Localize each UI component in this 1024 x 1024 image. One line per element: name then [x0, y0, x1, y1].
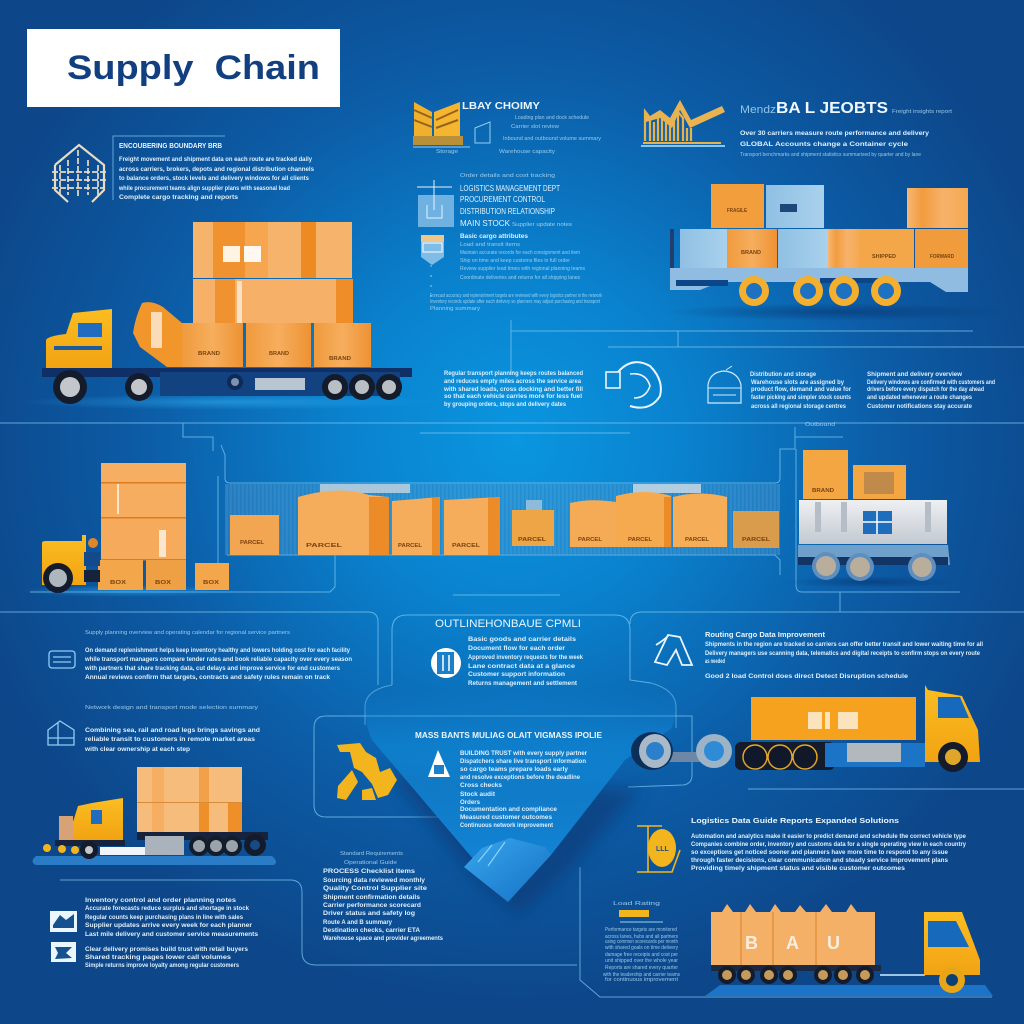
text block: right panel lower: Automation and analytics make it easier to predict demand and schedule the correct vehicle type	[691, 833, 966, 840]
text block: rating column: with the leadership and carrier teams	[602, 972, 680, 978]
truck: yellow cab with orange cargo: BRAND	[269, 351, 289, 357]
text block: central column: LOGISTICS MANAGEMENT DEPT	[460, 183, 560, 193]
text block: left panel lower: reliable transit to customers in remote market areas	[85, 736, 255, 743]
icon: yellow warehouse stack	[413, 102, 490, 147]
text block: central column: Forecast accuracy and replenishment targets are reviewed with every logistics partner in the network	[430, 293, 602, 299]
text block: bottom-left upper: Last mile delivery and customer service measurements	[85, 931, 258, 938]
truck: light blue carrier with orange cargo: BRAND	[741, 250, 761, 256]
warehouse band with parcels: PARCEL	[240, 540, 264, 546]
warehouse band with parcels: PARCEL	[306, 543, 342, 549]
text block: top-left intro: across carriers, brokers, depots and regional distribution channels	[119, 166, 314, 173]
text block: central column	[430, 173, 602, 312]
text block: central column: Review supplier lead times with regional planning teams	[460, 266, 585, 272]
text block: top-left intro: Freight movement and shipment data on each route are tracked daily	[119, 156, 312, 163]
text block: LBAY CHOIMY: LBAY CHOIMY	[462, 100, 540, 112]
text block: bottom-left lower: Simple returns improve loyalty among regular customers	[85, 962, 239, 969]
warehouse band with parcels: PARCEL	[452, 543, 480, 549]
warehouse band with parcels: PARCEL	[518, 537, 546, 543]
warehouse band with parcels: PARCEL	[742, 537, 770, 543]
text block: left panel lower	[84, 705, 260, 753]
text block: rating column	[602, 901, 680, 983]
truck: orange trailer with detached wheels	[631, 685, 980, 772]
text block: bottom center column	[323, 851, 443, 942]
truck: yellow cab with orange cargo	[20, 222, 440, 410]
text block: right panel upper: Good 2 load Control does direct Detect Disruption schedule	[705, 673, 908, 680]
text block: route notes: and reduces empty miles across the service area	[444, 378, 581, 385]
text block: central column: Load and transit items	[460, 242, 520, 248]
panel: funnel text: Dispatchers share live transport information	[460, 758, 586, 765]
truck: forklift with stacked boxes: BOX	[203, 580, 220, 586]
text block: central column: Order details and cost tracking	[460, 173, 555, 179]
text block: bottom center column: Destination checks, carrier ETA	[323, 927, 420, 934]
panel: center heading block	[431, 618, 583, 687]
text block: left panel upper: Annual reviews confirm that targets, contracts and safety rules remain on track	[85, 674, 330, 681]
panel: center heading block: Approved inventory requests for the week	[468, 654, 583, 661]
icon: cargo badge	[50, 911, 77, 932]
icon: circular supply loop	[606, 362, 661, 408]
text block: top-left intro: Complete cargo tracking and reports	[119, 194, 238, 201]
truck: yellow cab with orange cargo: BRAND	[329, 356, 351, 362]
warehouse band with parcels	[225, 484, 780, 555]
text block: LBAY CHOIMY: Storage	[436, 149, 458, 155]
icon: yellow map	[337, 743, 397, 800]
panel: center heading block: OUTLINEHONBAUE CPMLI	[435, 618, 581, 630]
text block: route notes: with shared loads, cross docking and better fill	[443, 386, 583, 393]
panel: funnel text: so cargo teams prepare loads early	[460, 766, 568, 773]
text block: bottom-left upper: Inventory control and order planning notes	[85, 897, 236, 904]
text block: top-left intro: to balance orders, stock levels and delivery windows for all clients	[119, 175, 309, 182]
text block: bottom-left upper: Supplier updates arrive every week for each planner	[85, 922, 252, 929]
panel: center heading block: Returns management and settlement	[468, 680, 578, 687]
text block: rating column: Performance targets are monitored	[605, 927, 677, 933]
text block: right panel upper	[705, 630, 983, 680]
icon: gold bar chart with trend	[641, 100, 725, 147]
truck: cargo container with yellow cab	[705, 904, 993, 996]
text block: delivery notes	[867, 371, 995, 410]
text block: bottom-left upper: Regular counts keep purchasing plans in line with sales	[85, 914, 243, 921]
panel: center heading block: Document flow for each order	[468, 645, 565, 652]
text block: central column: Maintain accurate records for each consignment and item	[460, 250, 580, 256]
text block: storage notes: product flow, demand and value for	[751, 386, 851, 393]
truck: white trailer with boxes	[785, 450, 955, 588]
text block: BA L JEOBTS: Over 30 carriers measure route performance and delivery	[740, 130, 929, 137]
truck: forklift with stacked boxes: BOX	[155, 580, 172, 586]
truck: cargo container with yellow cab: B A U	[745, 933, 840, 953]
text block: storage notes: Warehouse slots are assigned by	[751, 379, 844, 386]
text block: central column: Planning summary	[430, 306, 480, 312]
panel: funnel text	[415, 731, 603, 829]
text block: bottom-left lower: Clear delivery promises build trust with retail buyers	[85, 946, 248, 953]
text block: central column: PROCUREMENT CONTROL	[460, 194, 545, 204]
text block: bottom center column: Route A and B summary	[323, 919, 392, 926]
truck: light blue carrier with orange cargo: FORWARD	[930, 254, 954, 260]
text block: central column: DISTRIBUTION RELATIONSHIP	[460, 206, 555, 216]
truck: white trailer with boxes: BRAND	[812, 488, 834, 494]
text block: LBAY CHOIMY: Inbound and outbound volume summary	[503, 136, 601, 142]
text block: LBAY CHOIMY: Warehouse capacity	[499, 149, 555, 155]
text block: left panel lower: with clear ownership at each step	[84, 746, 190, 753]
text block: top-left intro: while procurement teams align supplier plans with seasonal load	[118, 185, 290, 192]
text block: right panel lower: so exceptions get noticed sooner and planners have more time to respond to any issue	[691, 849, 948, 856]
icon: yellow L and coin: LLL	[656, 846, 670, 853]
text block: rating column: using common scorecards per month	[605, 939, 678, 945]
text block: BA L JEOBTS: BA L JEOBTS	[776, 100, 888, 117]
icon: small shield badge	[421, 235, 444, 300]
panel: funnel text: Orders	[460, 799, 480, 806]
panel: center heading block: Basic goods and carrier details	[468, 636, 576, 643]
text block: central column: Inventory records update after each delivery so planners may adjust purchasing and transport	[430, 299, 600, 305]
warehouse band with parcels: PARCEL	[685, 537, 709, 543]
panel: funnel text: MASS BANTS MULIAG OLAIT VIGMASS IPOLIE	[415, 731, 603, 740]
panel: funnel text: Cross checks	[460, 782, 502, 789]
funnel shape	[365, 685, 676, 915]
text block: storage notes: Distribution and storage	[750, 371, 816, 378]
text block: rating column: across lanes, hubs and all partners	[605, 934, 678, 940]
text block: central column: Ship on time and keep customs files in full order	[460, 258, 570, 264]
title banner: Supply Chain	[67, 49, 320, 87]
text block: rating column: damage free receipts and cost per	[605, 952, 678, 958]
warehouse band with parcels: PARCEL	[628, 537, 652, 543]
text block: route notes: Regular transport planning keeps routes balanced	[444, 370, 583, 377]
text block: left panel upper: Supply planning overview and operating calendar for regional service partners	[85, 630, 290, 636]
text block: left panel upper	[84, 630, 352, 681]
text block: BA L JEOBTS: Freight insights report	[892, 109, 953, 115]
text block: left panel lower: Combining sea, rail and road legs brings savings and	[85, 727, 260, 734]
text block: left panel upper: while transport managers compare tender rates and book reliable capacity over every season	[84, 656, 352, 663]
text block: storage notes: faster picking and simpler stock counts	[751, 394, 851, 401]
text block: bottom-left upper: Accurate forecasts reduce surplus and shortage in stock	[85, 905, 249, 912]
text block: rating column: with shared goals on time delivery	[604, 945, 678, 951]
text block: delivery notes: Customer notifications stay accurate	[867, 403, 972, 410]
text block: BA L JEOBTS: GLOBAL Accounts change a Container cycle	[740, 141, 908, 148]
icon: service lane	[655, 635, 692, 665]
icon: yellow L and coin	[637, 826, 680, 872]
text block: rating column: unit shipped over the whole year	[605, 958, 678, 964]
text block: bottom center column: Warehouse space and provider agreements	[323, 935, 443, 942]
panel: funnel text: BUILDING TRUST with every supply partner	[460, 750, 587, 757]
text block: bottom-left lower: Shared tracking pages lower call volumes	[85, 954, 231, 961]
truck: light blue carrier with orange cargo	[665, 184, 1015, 321]
text block: left panel upper: On demand replenishment helps keep inventory healthy and lowers holding cost for each facility	[85, 647, 350, 654]
text block: BA L JEOBTS: Transport benchmarks and shipment statistics summarised by quarter and by lane	[740, 152, 921, 158]
icon: route flag	[51, 942, 76, 962]
panel: funnel text: Measured customer outcomes	[460, 814, 552, 821]
text block: bottom center column: Shipment confirmation details	[323, 894, 420, 901]
text block: route notes	[443, 370, 583, 408]
text block: rating column: Reports are shared every quarter	[605, 965, 678, 971]
text block: BA L JEOBTS: Mendz	[740, 104, 776, 116]
text block: rating column: for continuous improvement	[605, 977, 678, 983]
text block: delivery notes: and updated whenever a route changes	[867, 394, 972, 401]
text block: right panel lower: Providing timely shipment status and visible customer outcomes	[691, 865, 905, 872]
panel: funnel text: and resolve exceptions before the deadline	[460, 774, 580, 781]
icon: wireframe warehouse	[52, 145, 106, 202]
icon: left panel chip	[49, 651, 75, 668]
text block: central column: MAIN STOCK	[460, 218, 510, 228]
panel: funnel text: Stock audit	[460, 791, 496, 798]
text block: storage notes: across all regional storage centres	[751, 403, 846, 410]
text block: bottom-left upper	[85, 897, 258, 938]
text block: bottom-left lower	[85, 946, 248, 969]
panel: center heading block: Customer support information	[468, 671, 565, 678]
text block: route notes: so that each vehicle carries more for less fuel	[444, 393, 582, 400]
truck: light blue carrier with orange cargo: FRAGILE	[727, 208, 748, 214]
text block: central column: Basic cargo attributes	[460, 233, 528, 240]
text block: BA L JEOBTS	[740, 100, 953, 158]
text block: LBAY CHOIMY: Loading plan and dock schedule	[515, 115, 589, 121]
text block: right panel lower: Companies combine order, inventory and customs data for a single operating view in each country	[691, 841, 966, 848]
text block: bottom center column: PROCESS Checklist items	[323, 868, 415, 875]
panel: funnel text: Documentation and compliance	[460, 806, 557, 813]
text block: bottom center column: Quality Control Supplier site	[323, 885, 427, 892]
icon: storage dome	[708, 366, 741, 403]
text block: central column: Supplier update notes	[512, 222, 572, 228]
text block: bottom center column: Driver status and safety log	[323, 910, 415, 917]
icon: left panel parcel	[48, 721, 74, 745]
text block: top-left intro	[113, 136, 314, 201]
truck: forklift with stacked boxes: BOX	[110, 580, 127, 586]
truck: yellow cab with orange cargo: BRAND	[198, 351, 220, 357]
text block: top-left intro: ENCOUBERING BOUNDARY BRB	[119, 141, 222, 150]
text block: LBAY CHOIMY: Carrier slot review	[511, 124, 559, 130]
text block: rating column: Load Rating	[613, 901, 660, 907]
text block: right panel upper: as needed	[705, 658, 725, 665]
icon: blue square diagram	[417, 180, 454, 227]
truck: forklift with stacked boxes	[20, 463, 240, 597]
text block: bottom center column: Sourcing data reviewed monthly	[323, 877, 425, 884]
text block: right panel lower	[691, 816, 966, 872]
warehouse band with parcels: PARCEL	[398, 543, 422, 549]
warehouse band with parcels: PARCEL	[578, 537, 602, 543]
text block: delivery notes: drivers before every dispatch for the day ahead	[867, 386, 984, 393]
text block: bottom center column: Standard Requirements	[340, 851, 403, 857]
text block: right panel lower: Logistics Data Guide Reports Expanded Solutions	[691, 816, 899, 825]
panel: funnel text: Continuous network improvement	[460, 822, 554, 829]
small label above white trailer: Outbound	[805, 422, 835, 428]
text block: bottom center column: Operational Guide	[344, 860, 397, 866]
text block: bottom center column: Carrier performance scorecard	[323, 902, 421, 909]
text block: left panel upper: with partners that share tracking data, cut delays and improve service for end customers	[84, 665, 340, 672]
text block: right panel upper: Routing Cargo Data Improvement	[705, 630, 826, 639]
text block: central column: Coordinate deliveries and returns for all shipping lanes	[460, 275, 580, 281]
text block: LBAY CHOIMY	[436, 100, 601, 155]
text block: left panel lower: Network design and transport mode selection summary	[85, 705, 258, 711]
panel: center heading block: Lane contract data at a glance	[468, 663, 575, 670]
text block: delivery notes: Shipment and delivery overview	[867, 371, 963, 378]
text block: right panel upper: Delivery managers use scanning data, telematics and digital receipts to confirm stops on every route	[705, 650, 980, 657]
text block: right panel upper: Shipments in the region are tracked so carriers can offer better transit and lower waiting time for all	[705, 641, 983, 648]
text block: storage notes	[750, 371, 851, 410]
truck: cargo on blue platform	[32, 767, 276, 865]
text block: route notes: by grouping orders, stops and delivery dates	[444, 401, 566, 408]
text block: right panel lower: through faster decisions, clear communication and steady service improvement plans	[691, 857, 948, 864]
title banner	[27, 29, 340, 107]
truck: light blue carrier with orange cargo: SHIPPED	[872, 254, 896, 260]
